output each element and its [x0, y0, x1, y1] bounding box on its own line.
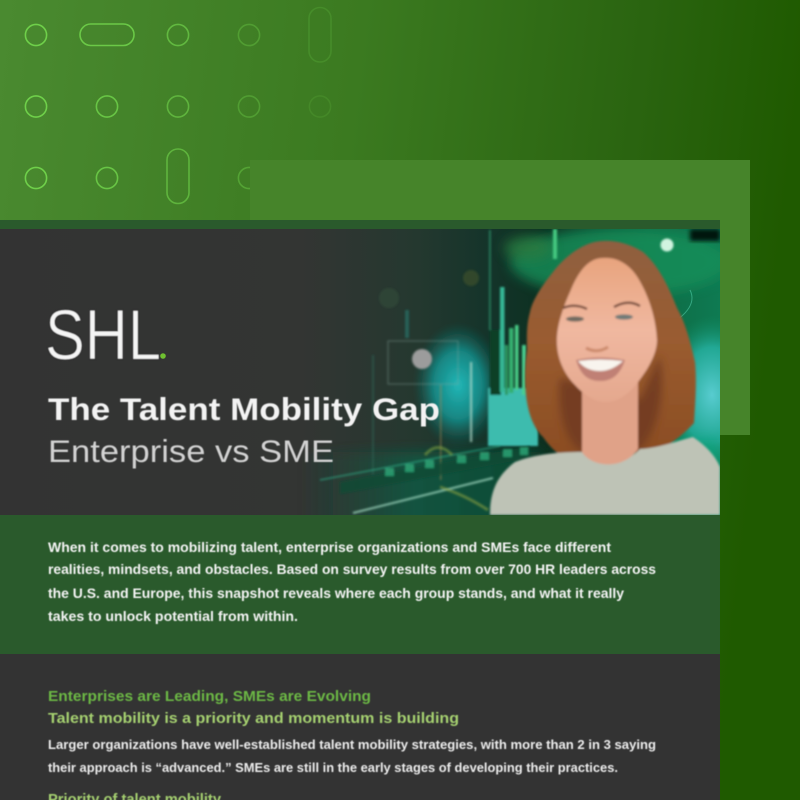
subtitle: Enterprise vs SME	[48, 433, 334, 469]
section: enterprises are leading	[48, 688, 656, 800]
light green offset panel	[250, 160, 750, 435]
title	[48, 391, 440, 469]
nose shadow	[586, 347, 608, 351]
section heading: Enterprises are Leading, SMEs are Evolving	[48, 688, 371, 705]
intro paragraph: realities, mindsets, and obstacles. Based on survey results from over 700 HR leaders across	[48, 561, 656, 577]
section body text: Larger organizations have well-established talent mobility strategies, with more than 2 in 3 saying	[48, 737, 656, 752]
intro paragraph: the U.S. and Europe, this snapshot reveals where each group stands, and what it really	[48, 585, 624, 601]
darker lower hair shadow	[559, 355, 662, 452]
SHL logo: SHL	[45, 296, 161, 376]
dark green document frame	[0, 220, 720, 654]
hero banner	[0, 229, 720, 515]
title: The Talent Mobility Gap	[48, 391, 440, 427]
intro paragraph	[48, 539, 656, 624]
face	[557, 258, 657, 402]
hair	[525, 241, 696, 463]
section body text	[48, 737, 656, 775]
decorative pattern of outlined circles and pills	[25, 8, 331, 204]
intro paragraph: takes to unlock potential from within.	[48, 608, 298, 624]
smile	[576, 358, 625, 381]
section subheading: Talent mobility is a priority and momentum is building	[48, 710, 459, 727]
logo green dot	[160, 353, 166, 359]
film strip and light streaks	[320, 446, 530, 513]
sweater	[490, 437, 720, 515]
dark lower panel	[0, 654, 720, 800]
eyebrows and eyes	[563, 303, 640, 322]
portrait of smiling woman	[490, 241, 720, 515]
neck	[582, 380, 638, 464]
intro paragraph: When it comes to mobilizing talent, enterprise organizations and SMEs face different	[48, 539, 611, 555]
hero background art	[0, 229, 720, 515]
section body text: their approach is “advanced.” SMEs are still in the early stages of developing their practices.	[48, 760, 618, 775]
SHL logo	[48, 309, 166, 360]
